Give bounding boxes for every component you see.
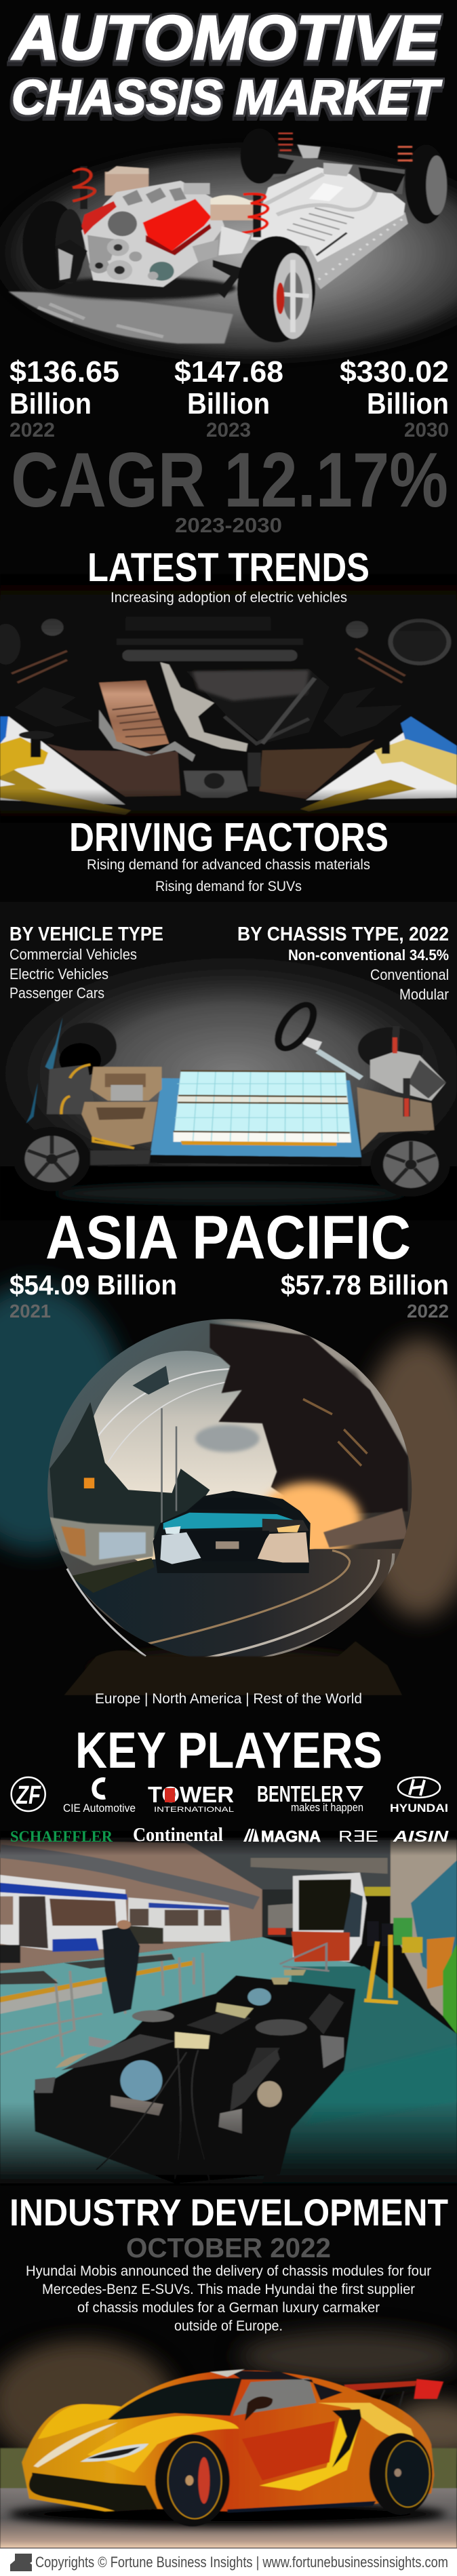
statistic: 2022 market size: Billion	[9, 387, 92, 420]
statistic: asia pacific 2021: $54.09 Billion	[9, 1269, 177, 1301]
image: car reflected in glass sphere	[0, 1284, 457, 1695]
heading: key players: KEY PLAYERS	[75, 1722, 382, 1779]
panel: by vehicle type: Passenger Cars	[9, 985, 104, 1002]
logo: Hyundai	[390, 1777, 448, 1815]
image: tram chassis factory	[0, 1831, 457, 2185]
statistic: 2030 market size: 2030	[404, 419, 449, 441]
text: other regions list: Europe | North America | Rest of the World	[95, 1691, 362, 1707]
title: AUTOMOTIVE	[12, 3, 441, 73]
statistic: asia pacific 2022: $57.78 Billion	[281, 1269, 449, 1301]
panel: by vehicle type: Commercial Vehicles	[9, 946, 137, 963]
panel: by vehicle type: Electric Vehicles	[9, 966, 108, 983]
heading: driving factors	[69, 815, 389, 894]
logo: ZF: ZF	[16, 1781, 41, 1810]
statistic: 2022 market size	[9, 355, 119, 441]
panel: by vehicle type	[9, 924, 163, 1002]
logo: Benteler: BENTELER	[257, 1781, 343, 1806]
statistic: asia pacific 2021: 2021	[9, 1301, 51, 1322]
text: industry development description: of chassis modules for a German luxury carmaker	[77, 2300, 380, 2316]
logo: Continental: Continental	[133, 1824, 223, 1846]
heading: asia pacific: ASIA PACIFIC	[45, 1204, 411, 1272]
image: car chassis with engine	[0, 128, 457, 371]
logo: Fortune Business Insights	[10, 2554, 32, 2571]
logo: Aisin: AISIN	[393, 1827, 449, 1845]
logo: Magna: MAGNA	[261, 1827, 321, 1845]
statistic: asia pacific 2021	[9, 1269, 177, 1322]
panel: by chassis type: Modular	[399, 986, 449, 1003]
panel: by chassis type: Non-conventional 34.5%	[288, 947, 449, 964]
logo: Schaeffler: SCHAEFFLER	[10, 1828, 113, 1845]
footer bar	[0, 2548, 457, 2576]
heading: latest trends: Increasing adoption of electric vehicles	[111, 590, 347, 606]
statistic: 2023 market size: Billion	[187, 387, 270, 420]
logo: REE: R∃E	[338, 1827, 378, 1845]
logo: Hyundai: HYUNDAI	[390, 1802, 448, 1815]
logo: Tower International: INTERNATIONAL	[154, 1806, 234, 1814]
logo: Tower International: TOWER	[148, 1782, 234, 1807]
statistic: asia pacific 2022: 2022	[407, 1301, 449, 1322]
text: industry development description	[26, 2263, 431, 2334]
statistic: 2030 market size: Billion	[367, 387, 449, 420]
heading: latest trends: LATEST TRENDS	[87, 545, 370, 590]
heading: latest trends	[87, 545, 370, 606]
title: CHASSIS MARKET	[12, 71, 443, 125]
text: industry development description: outside of Europe.	[174, 2318, 283, 2334]
heading: driving factors: Rising demand for SUVs	[155, 879, 302, 894]
statistic: 2023 market size	[174, 355, 283, 441]
heading: industry development: OCTOBER 2022	[126, 2232, 331, 2263]
panel: by chassis type: Conventional	[370, 966, 449, 983]
statistic: 2022 market size: $136.65	[9, 355, 119, 389]
image: EV skateboard chassis	[0, 902, 457, 1221]
heading: driving factors: Rising demand for advanced chassis materials	[87, 857, 370, 873]
statistic: 2030 market size: $330.02	[340, 355, 449, 389]
panel: by chassis type	[237, 924, 449, 1003]
statistic: 2030 market size	[340, 355, 449, 441]
logo: CIE Automotive	[63, 1780, 136, 1815]
statistic: 2023 market size: $147.68	[174, 355, 283, 389]
title	[12, 3, 443, 125]
image: car underbody on lift	[0, 574, 457, 823]
heading: industry development	[9, 2191, 448, 2263]
logo: ZF	[12, 1777, 45, 1811]
text: industry development description: Mercedes-Benz E-SUVs. This made Hyundai the first supplier	[42, 2282, 415, 2297]
statistic: asia pacific 2022	[281, 1269, 449, 1322]
panel: by vehicle type: BY VEHICLE TYPE	[9, 924, 163, 945]
statistic: 2023 market size: 2023	[206, 419, 251, 441]
heading: driving factors: DRIVING FACTORS	[69, 815, 389, 860]
statistic: CAGR: 2023-2030	[175, 513, 282, 537]
statistic: 2022 market size: 2022	[9, 419, 55, 441]
logo: Benteler: makes it happen	[291, 1801, 363, 1814]
logo: Benteler	[257, 1781, 363, 1814]
image: orange sports car	[0, 2331, 457, 2548]
logo: CIE Automotive: CIE Automotive	[63, 1802, 136, 1815]
text: industry development description: Hyundai Mobis announced the delivery of chassis modules for four	[26, 2263, 431, 2279]
